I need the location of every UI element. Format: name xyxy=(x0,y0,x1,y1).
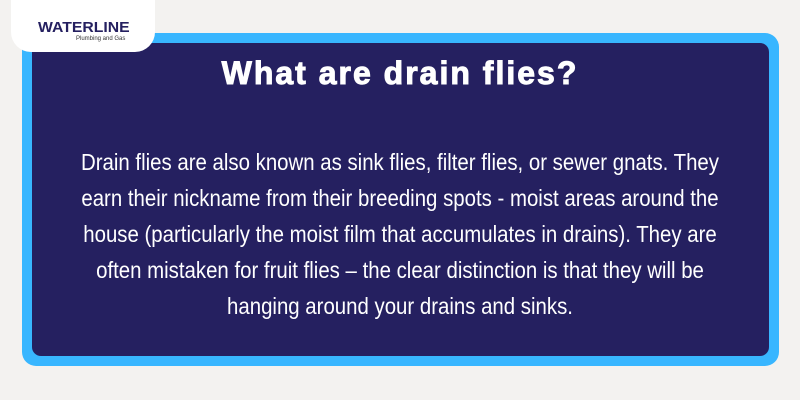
logo tagline: Plumbing and Gas xyxy=(76,36,125,42)
text block xyxy=(81,149,719,319)
text block: hanging around your drains and sinks. xyxy=(227,293,573,319)
panel: outer frame xyxy=(22,33,779,366)
title: What are drain flies? xyxy=(222,55,578,91)
text block: often mistaken for fruit flies – the clear distinction is that they will be xyxy=(96,257,704,283)
text block: house (particularly the moist film that accumulates in drains). They are xyxy=(83,221,717,247)
logo wordmark: WATERLINE xyxy=(38,19,130,36)
text block: Drain flies are also known as sink flies, filter flies, or sewer gnats. They xyxy=(81,149,719,175)
logo xyxy=(11,0,155,52)
text block: earn their nickname from their breeding spots - moist areas around the xyxy=(81,185,719,211)
panel: main xyxy=(32,43,769,356)
